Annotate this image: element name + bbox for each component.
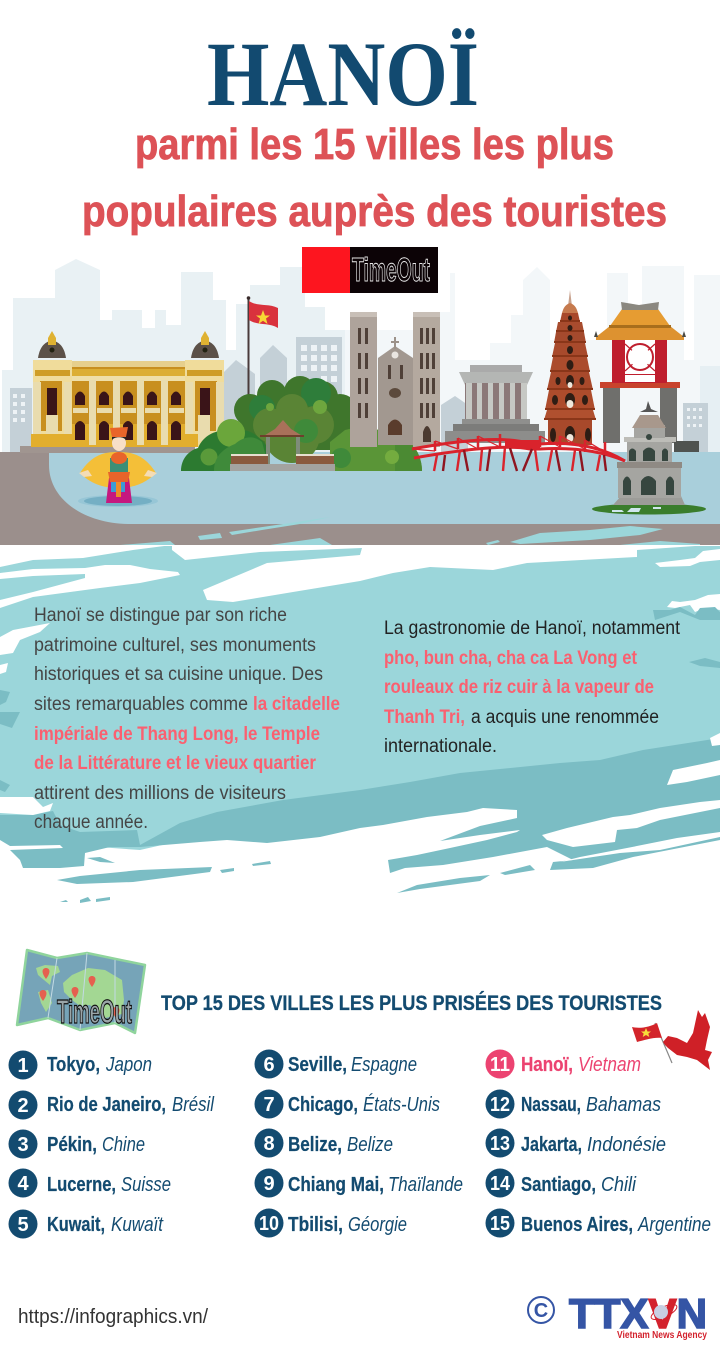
TTXVN letters: TTXVN xyxy=(569,1290,707,1337)
ground xyxy=(0,452,720,545)
rank 12: 12 xyxy=(490,1094,510,1116)
rank 1: Japon xyxy=(105,1054,152,1076)
rank 5 xyxy=(8,1210,164,1238)
text block: right paragraph: a acquis une renommée xyxy=(471,707,659,728)
subtitle line 1: parmi les 15 villes les plus xyxy=(135,120,614,169)
rank 9: Chiang Mai, xyxy=(288,1174,384,1196)
rank 7: 7 xyxy=(263,1094,275,1116)
text block: right paragraph: rouleaux de riz cuir à la vapeur de xyxy=(384,677,654,698)
rank 1: 1 xyxy=(17,1055,29,1077)
text block: left paragraph: sites remarquables comme xyxy=(34,694,248,715)
rank 9: 9 xyxy=(263,1173,275,1195)
rank 11: Hanoi highlighted xyxy=(486,1050,641,1078)
rank 3: Chine xyxy=(102,1134,145,1156)
rank 6: 6 xyxy=(263,1054,275,1076)
rank 11: Hanoi highlighted: Vietnam xyxy=(578,1054,641,1076)
rank 13: Indonésie xyxy=(587,1134,666,1156)
ground streaks xyxy=(120,517,700,545)
text block: right paragraph: La gastronomie de Hanoï, notamment xyxy=(384,618,681,639)
copyright symbol: C xyxy=(534,1300,548,1322)
text block: right paragraph xyxy=(384,618,681,757)
rank 3: Pékin, xyxy=(47,1134,97,1156)
rank 2 xyxy=(8,1090,214,1120)
list column 3 xyxy=(486,1050,711,1238)
icon: world map with TimeOut logo xyxy=(17,950,145,1033)
rank 8 xyxy=(254,1128,393,1158)
text block: left paragraph: patrimoine culturel, ses monuments xyxy=(34,635,316,656)
rank 10: Géorgie xyxy=(348,1214,407,1236)
rank 5: Kuwait, xyxy=(47,1214,105,1236)
dark brush details xyxy=(0,607,720,903)
logo text: TimeOut xyxy=(352,251,430,288)
copyright symbol xyxy=(528,1297,554,1323)
text block: left paragraph: impériale de Thang Long, le Temple xyxy=(34,724,320,745)
rank 9 xyxy=(254,1168,463,1198)
rank 3: 3 xyxy=(17,1134,29,1156)
text block: left paragraph: attirent des millions de visiteurs xyxy=(34,783,286,804)
rank 6: Espagne xyxy=(351,1054,417,1076)
icon: dove with flag xyxy=(632,1010,712,1070)
rank 15: Buenos Aires, xyxy=(521,1214,633,1236)
text block: right paragraph: pho, bun cha, cha ca La Vong et xyxy=(384,648,638,669)
rank 8: 8 xyxy=(263,1133,275,1155)
footer url: https://infographics.vn/ xyxy=(18,1306,208,1328)
rank 11: Hanoi highlighted: Hanoï, xyxy=(521,1054,573,1076)
rank 13 xyxy=(486,1128,666,1158)
icon: mausoleum xyxy=(445,365,545,443)
icon: opera house xyxy=(20,331,224,453)
text block: right paragraph: Thanh Tri, xyxy=(384,707,465,728)
rank 5: 5 xyxy=(17,1214,29,1236)
rank 10 xyxy=(254,1208,407,1238)
rank 15: 15 xyxy=(490,1213,510,1235)
panel: brush stroke background xyxy=(0,545,720,903)
rank 13: Jakarta, xyxy=(521,1134,582,1156)
panel: city skyline illustration xyxy=(0,259,720,545)
lake xyxy=(49,452,720,524)
agency name: Vietnam News Agency xyxy=(617,1330,707,1341)
rank 7: Chicago, xyxy=(288,1094,358,1116)
rank 12: Nassau, xyxy=(521,1094,581,1116)
rank 2: Brésil xyxy=(172,1094,214,1116)
panel: timeout logo banner xyxy=(302,247,438,293)
text block: left paragraph xyxy=(34,605,340,833)
title: HANOÏ: HANOÏ xyxy=(207,23,479,125)
rank 14: Chili xyxy=(601,1174,636,1196)
icon: red Huc bridge xyxy=(412,434,625,471)
rank 12 xyxy=(486,1090,661,1118)
text block: left paragraph: historiques et sa cuisine unique. Des xyxy=(34,664,323,685)
rank 3 xyxy=(8,1130,145,1158)
icon: water puppet dancer xyxy=(78,427,158,507)
rank 14: 14 xyxy=(490,1173,511,1195)
rank 2: 2 xyxy=(17,1095,29,1117)
rank 14 xyxy=(486,1168,636,1198)
logo: TTXVN copyright xyxy=(528,1290,707,1341)
rank 2: Rio de Janeiro, xyxy=(47,1094,166,1116)
text block: left paragraph: de la Littérature et le vieux quartier xyxy=(34,753,317,774)
rank 9: Thaïlande xyxy=(388,1174,463,1196)
map logo text: TimeOut xyxy=(57,993,132,1030)
rank 6 xyxy=(254,1050,417,1078)
white brush gaps xyxy=(0,545,720,862)
text block: left paragraph: chaque année. xyxy=(34,812,148,833)
rank 1: Tokyo, xyxy=(47,1054,100,1076)
rank 4: Suisse xyxy=(121,1174,171,1196)
icon: pagoda tower xyxy=(544,290,596,445)
rank 7: États-Unis xyxy=(363,1093,440,1116)
text block: right paragraph: internationale. xyxy=(384,736,497,757)
rank 13: 13 xyxy=(490,1133,510,1155)
rank 4 xyxy=(8,1168,171,1198)
rank 15 xyxy=(486,1208,711,1238)
icon: Vietnamese flag on pole xyxy=(247,296,278,398)
icon: trees and pavilion xyxy=(181,376,422,471)
text block: left paragraph: la citadelle xyxy=(253,694,340,715)
rank 10: 10 xyxy=(259,1213,279,1235)
rank 7 xyxy=(254,1090,440,1118)
rank 4: Lucerne, xyxy=(47,1174,116,1196)
rank 5: Kuwaït xyxy=(111,1214,164,1236)
rank 8: Belize xyxy=(347,1134,393,1156)
icon: cathedral xyxy=(350,312,440,447)
rank 8: Belize, xyxy=(288,1134,342,1156)
rank 6: Seville, xyxy=(288,1054,347,1076)
pale skyline background xyxy=(2,259,720,452)
rank 11: Hanoi highlighted: 11 xyxy=(490,1054,510,1076)
rank 14: Santiago, xyxy=(521,1174,596,1196)
rank 1 xyxy=(8,1050,152,1080)
building windows xyxy=(13,345,702,427)
rank 4: 4 xyxy=(17,1173,29,1195)
text block: left paragraph: Hanoï se distingue par son riche xyxy=(34,605,287,626)
grey background buildings xyxy=(10,337,708,452)
list column 2 xyxy=(254,1050,463,1238)
icon: temple gate xyxy=(594,302,699,452)
rank 12: Bahamas xyxy=(586,1094,661,1116)
icon: Turtle Tower xyxy=(592,401,706,514)
rank 10: Tbilisi, xyxy=(288,1214,343,1236)
list column 1 xyxy=(8,1050,214,1238)
